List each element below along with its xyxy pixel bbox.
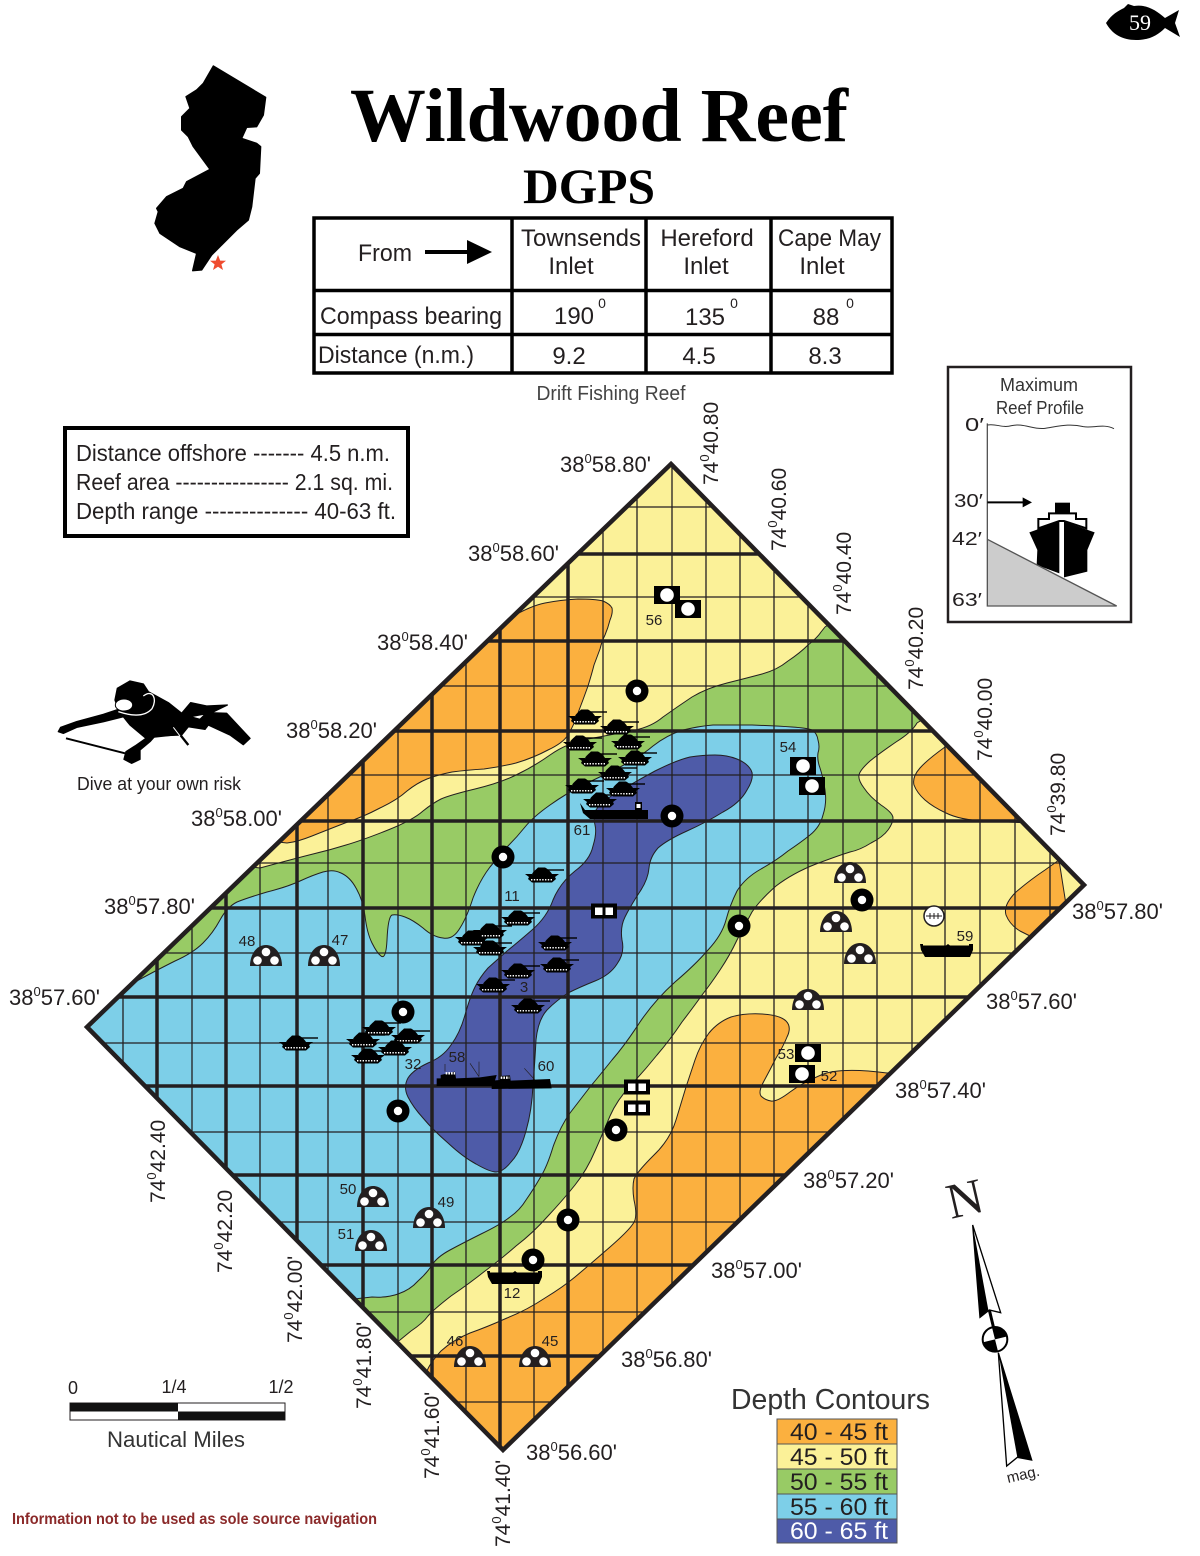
footer: navigation warning: Information not to be used as sole source navigation [12,1511,377,1528]
latitude labels: 38 [1072,899,1096,924]
longitude labels: 74 [214,1250,237,1273]
site numbers: 54 [780,739,796,756]
longitude labels: 0 [281,1312,296,1320]
longitude labels [144,402,1070,1547]
compass: magnetic north arrow [941,1167,1041,1487]
latitude labels: 38 [9,985,33,1010]
longitude labels: 42.00' [284,1256,307,1312]
panel: maximum reef profile: 30′ [954,491,984,511]
panel: maximum reef profile: 0′ [965,415,985,435]
table: bearings and distances: 0 [598,295,606,311]
longitude labels: 74 [147,1180,170,1203]
icon: wreck buoy [924,906,944,926]
panel: reef facts [65,428,408,536]
latitude labels: 0 [550,1439,558,1454]
latitude labels [9,451,1163,1465]
table: bearings and distances: From [358,240,412,267]
map: depth contour chart [60,464,1084,1460]
site numbers: 47 [332,932,348,949]
longitude labels: 0 [902,659,917,667]
legend: depth contours: Depth Contours [731,1384,930,1416]
panel: maximum reef profile: 42′ [952,529,983,549]
latitude labels: 58.80' [592,452,651,477]
panel: maximum reef profile: Reef Profile [996,398,1084,418]
panel: reef facts: Reef area ---------------- 2.1 sq. mi. [76,469,393,495]
latitude labels: 38 [711,1258,735,1283]
longitude labels: 74 [492,1524,515,1547]
longitude labels: 0 [350,1378,365,1386]
table: bearings and distances: Distance (n.m.) [318,342,474,369]
latitude labels: 57.20' [835,1168,894,1193]
site numbers: 56 [646,612,662,629]
longitude labels: 74 [421,1456,444,1479]
site numbers [239,612,973,1350]
site numbers: 59 [957,928,973,945]
longitude labels: 0 [144,1172,159,1180]
longitude labels: 74 [284,1320,307,1343]
latitude labels: 38 [468,541,492,566]
latitude labels: 38 [986,989,1010,1014]
latitude labels: 0 [827,1167,835,1182]
table: bearings and distances: 4.5 [682,343,716,370]
table: bearings and distances: 135 [685,304,725,331]
compass: magnetic north arrow: mag. [1005,1463,1041,1487]
longitude labels: 39.80 [1047,753,1070,805]
scale bar: nautical miles: Nautical Miles [107,1427,245,1452]
panel: maximum reef profile: 63′ [952,590,983,610]
subtitle: DGPS [523,158,655,214]
table: bearings and distances: Hereford [660,225,754,252]
table: bearings and distances: Inlet [548,253,594,280]
table: bearings and distances: Cape May [778,225,881,252]
icons: ring markers [386,680,874,1272]
site numbers: 60 [538,1058,554,1075]
graticule [87,464,1084,1450]
icon: ships 58 and 60 [437,1062,552,1089]
longitude labels: 40.80 [700,402,723,454]
legend: depth contours: 50 - 55 ft [790,1469,888,1496]
scale bar: nautical miles: 0 [68,1378,78,1398]
site numbers: 52 [821,1068,837,1085]
latitude labels: 38 [526,1440,550,1465]
legend: depth contours: 60 - 65 ft [790,1518,888,1545]
table: bearings and distances [314,218,892,373]
latitude labels: 38 [895,1078,919,1103]
longitude labels: 74 [353,1386,376,1409]
panel: maximum reef profile: Maximum [1000,375,1078,395]
site numbers: 12 [504,1285,520,1302]
panel: reef facts: Distance offshore ------- 4.5 n.m. [76,440,390,466]
compass: magnetic north arrow: N [941,1167,989,1230]
legend: depth contours [731,1384,930,1545]
longitude labels: 41.40' [492,1460,515,1516]
site numbers: 61 [574,822,590,839]
icon: ship 61 [580,802,648,819]
latitude labels: 0 [584,451,592,466]
latitude labels: 57.40' [927,1078,986,1103]
site numbers: 11 [504,888,520,905]
latitude labels: 58.60' [500,541,559,566]
caption: drift fishing reef: Drift Fishing Reef [536,383,686,405]
table: bearings and distances: 88 [813,304,839,331]
latitude labels: 0 [1010,988,1018,1003]
latitude labels: 0 [1096,898,1104,913]
longitude labels: 0 [697,454,712,462]
latitude labels: 0 [33,984,41,999]
site numbers: 3 [520,979,528,996]
site numbers: 45 [542,1333,558,1350]
longitude labels: 0 [418,1448,433,1456]
latitude labels: 38 [621,1347,645,1372]
latitude labels: 0 [919,1077,927,1092]
icons: square block units [591,586,825,1116]
site numbers: 32 [405,1056,421,1073]
icons: tanks [279,710,657,1064]
latitude labels: 57.80' [1104,899,1163,924]
site numbers: 51 [338,1226,354,1243]
table: bearings and distances: 0 [846,295,854,311]
table: bearings and distances: 8.3 [808,343,842,370]
latitude labels: 58.40' [409,630,468,655]
site numbers: 49 [438,1194,454,1211]
latitude labels: 0 [215,805,223,820]
site numbers: 48 [239,933,255,950]
longitude labels: 41.60' [421,1392,444,1448]
icon: New Jersey silhouette with star [155,66,266,271]
icon: barge 59 [920,944,973,957]
longitude labels: 40.00 [974,678,997,730]
longitude labels: 40.40 [833,532,856,584]
table: bearings and distances: 190 [554,303,594,330]
longitude labels: 0 [1044,805,1059,813]
caption: dive at your own risk: Dive at your own risk [77,774,242,794]
longitude labels: 74 [700,462,723,485]
table: bearings and distances: Inlet [799,253,845,280]
latitude labels: 57.60' [41,985,100,1010]
panel: maximum reef profile [948,367,1131,622]
site numbers: 58 [449,1049,465,1066]
table: bearings and distances: 0 [730,295,738,311]
longitude labels: 0 [830,584,845,592]
latitude labels: 57.60' [1018,989,1077,1014]
legend: depth contours: 40 - 45 ft [790,1419,888,1446]
latitude labels: 0 [401,629,409,644]
panel: reef facts: Depth range -------------- 40-63 ft. [76,498,396,524]
longitude labels: 74 [974,738,997,761]
scale bar: nautical miles: 1/2 [268,1377,294,1397]
latitude labels: 38 [286,718,310,743]
site numbers: 50 [340,1181,356,1198]
longitude labels: 40.60 [768,468,791,520]
latitude labels: 56.60' [558,1440,617,1465]
scale bar: nautical miles [68,1377,294,1452]
longitude labels: 0 [489,1516,504,1524]
latitude labels: 58.20' [318,718,377,743]
latitude labels: 38 [104,894,128,919]
longitude labels: 0 [971,730,986,738]
title: Wildwood Reef [350,74,850,158]
icon: barge 12 [487,1271,542,1284]
latitude labels: 38 [191,806,215,831]
table: bearings and distances: Compass bearing [320,303,502,330]
latitude labels: 57.80' [136,894,195,919]
scale bar: nautical miles: 1/4 [161,1377,187,1397]
legend: depth contours: 55 - 60 ft [790,1494,888,1521]
latitude labels: 0 [128,893,136,908]
longitude labels: 74 [905,667,928,690]
longitude labels: 74 [833,592,856,615]
latitude labels: 38 [377,630,401,655]
site numbers: 46 [447,1333,463,1350]
longitude labels: 42.40 [147,1120,170,1172]
latitude labels: 38 [560,452,584,477]
longitude labels: 41.80' [353,1322,376,1378]
longitude labels: 74 [768,528,791,551]
longitude labels: 0 [211,1242,226,1250]
legend: depth contours: 45 - 50 ft [790,1444,888,1471]
icons: reef dome units [250,862,876,1367]
latitude labels: 0 [492,540,500,555]
longitude labels: 0 [765,520,780,528]
fish page badge: 59 [1129,10,1151,35]
longitude labels: 74 [1047,813,1070,836]
latitude labels: 57.00' [743,1258,802,1283]
table: bearings and distances: Townsends [521,225,641,252]
latitude labels: 0 [735,1257,743,1272]
latitude labels: 0 [645,1346,653,1361]
depth layers [60,464,1084,1460]
longitude labels: 42.20 [214,1190,237,1242]
latitude labels: 58.00' [223,806,282,831]
table: bearings and distances: 9.2 [552,343,586,370]
site numbers: 53 [778,1046,794,1063]
fish page badge [1106,4,1180,40]
table: bearings and distances: Inlet [683,253,729,280]
longitude labels: 40.20 [905,607,928,659]
icon: scuba diver [58,681,250,763]
latitude labels: 38 [803,1168,827,1193]
latitude labels: 56.80' [653,1347,712,1372]
latitude labels: 0 [310,717,318,732]
